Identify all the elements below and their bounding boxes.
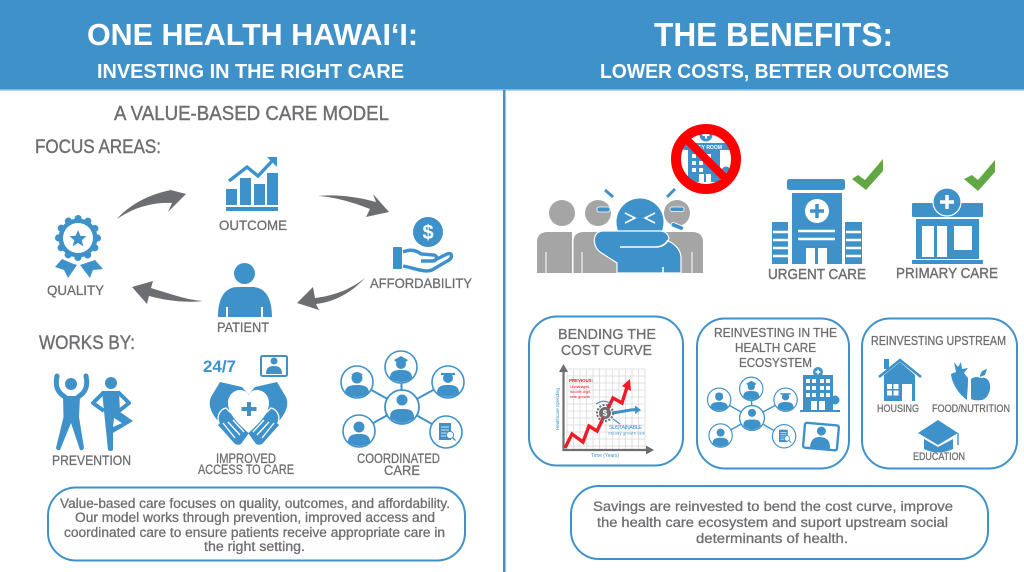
chart: cost curve: Healthcare Spending [555,388,561,430]
left title: ONE HEALTH HAWAI‘I: [87,17,418,52]
icon: housing [879,359,921,401]
heading: bending the cost curve [558,326,656,359]
panel: value-based care model [35,102,473,560]
chart: cost curve: SUSTAINABLE [609,425,642,431]
label: patient: PATIENT [217,319,269,335]
callout: value-based care summary [48,488,465,560]
icon: hospital [800,367,840,412]
arrow: outcome to affordability [318,194,389,217]
right title: THE BENEFITS: [654,16,893,53]
icon: hands holding heart [210,382,287,445]
chart: cost curve: double-digit [570,390,591,394]
label: improved access to care: ACCESS TO CARE [198,462,294,477]
chart: cost curve: Steady growth rate [608,430,646,436]
label: primary care: PRIMARY CARE [896,265,998,282]
icon: no emergency room sign: ENCY ROOM [691,145,722,151]
label: urgent care: URGENT CARE [768,266,866,283]
label: outcome: OUTCOME [219,217,287,233]
icon: education cap [918,420,958,452]
panel: bending the cost curve [529,316,683,466]
left subtitle: INVESTING IN THE RIGHT CARE [97,60,404,83]
icon: urgent care building [772,179,862,264]
chart: cost curve: Time (Years) [591,453,619,459]
right subtitle: LOWER COSTS, BETTER OUTCOMES [600,60,949,83]
label: food and nutrition: FOOD/NUTRITION [932,403,1010,415]
icon: care network [707,377,797,448]
chart: cost curve: rate growth [570,395,590,399]
chart: cost curve: Unmanaged, [570,385,590,389]
heading: bending the cost curve: COST CURVE [561,342,652,359]
callout: savings summary: Savings are reinvested to bend the cost curve, improve [593,498,953,514]
arrow: quality to outcome [117,188,186,219]
icon: prevention figures [56,376,133,451]
chart: cost curve: $ [603,409,608,418]
label: improved access to care [198,451,294,477]
callout: value-based care summary: Value-based care focuses on quality, outcomes, and affordability. [60,496,450,511]
heading: reinvesting in the ecosystem [714,326,837,370]
heading: reinvesting in the ecosystem: HEALTH CARE [735,341,816,355]
icon: telehealth tablet [803,423,839,451]
panel: the benefits [529,128,1017,559]
heading: works by: WORKS BY: [39,333,135,354]
label: improved access to care: IMPROVED [216,451,276,466]
label: education: EDUCATION [913,451,965,463]
icon: food and nutrition [951,362,990,400]
panel: reinvesting upstream [862,318,1017,468]
icon: primary care clinic [912,188,983,264]
icon: outcome chart [226,157,278,211]
icon: telehealth screen [261,356,287,376]
label: coordinated care: CARE [384,463,420,478]
label: quality: QUALITY [47,282,105,298]
panel: reinvesting in the health care ecosystem [697,318,849,468]
label: coordinated care: COORDINATED [357,451,440,466]
icon: coordinated care network [341,351,464,448]
icon: affordability hand and coin: $ [422,222,434,244]
arrow: patient to quality [132,281,203,304]
label: affordability: AFFORDABILITY [370,275,473,291]
icon: patient [218,263,272,317]
heading: reinvesting in the ecosystem: ECOSYSTEM [739,356,812,370]
chart: cost curve: PREVIOUS: [569,378,594,383]
icon: urgent care check mark [852,159,883,190]
callout: savings summary [571,486,988,559]
icon: primary care check mark [964,160,995,191]
chart: cost curve [555,364,654,459]
label: prevention: PREVENTION [52,452,131,468]
heading: reinvesting upstream: REINVESTING UPSTREAM [871,334,1006,348]
icon: no emergency room sign [676,128,736,189]
header band [0,0,1024,91]
callout: value-based care summary: the right setting. [204,539,305,554]
callout: savings summary: the health care ecosystem and suport upstream social [597,514,948,530]
label: housing: HOUSING [877,403,919,415]
label: coordinated care [357,451,440,478]
arrow: affordability to patient [297,278,365,310]
icon: quality badge [55,218,103,278]
heading: care model: A VALUE-BASED CARE MODEL [114,102,389,125]
callout: value-based care summary: Our model works through prevention, improved access and [75,510,435,525]
icon: affordability hand and coin [393,217,451,271]
heading: focus areas: FOCUS AREAS: [35,137,161,158]
label: 24/7: 24/7 [203,358,236,376]
heading: reinvesting in the ecosystem: REINVESTING IN THE [714,326,837,340]
callout: value-based care summary: coordinated care to ensure patients receive appropriate care in [64,525,445,540]
heading: bending the cost curve: BENDING THE [558,326,656,343]
icon: crowd of patients [537,189,703,273]
callout: savings summary: determinants of health. [696,530,848,546]
